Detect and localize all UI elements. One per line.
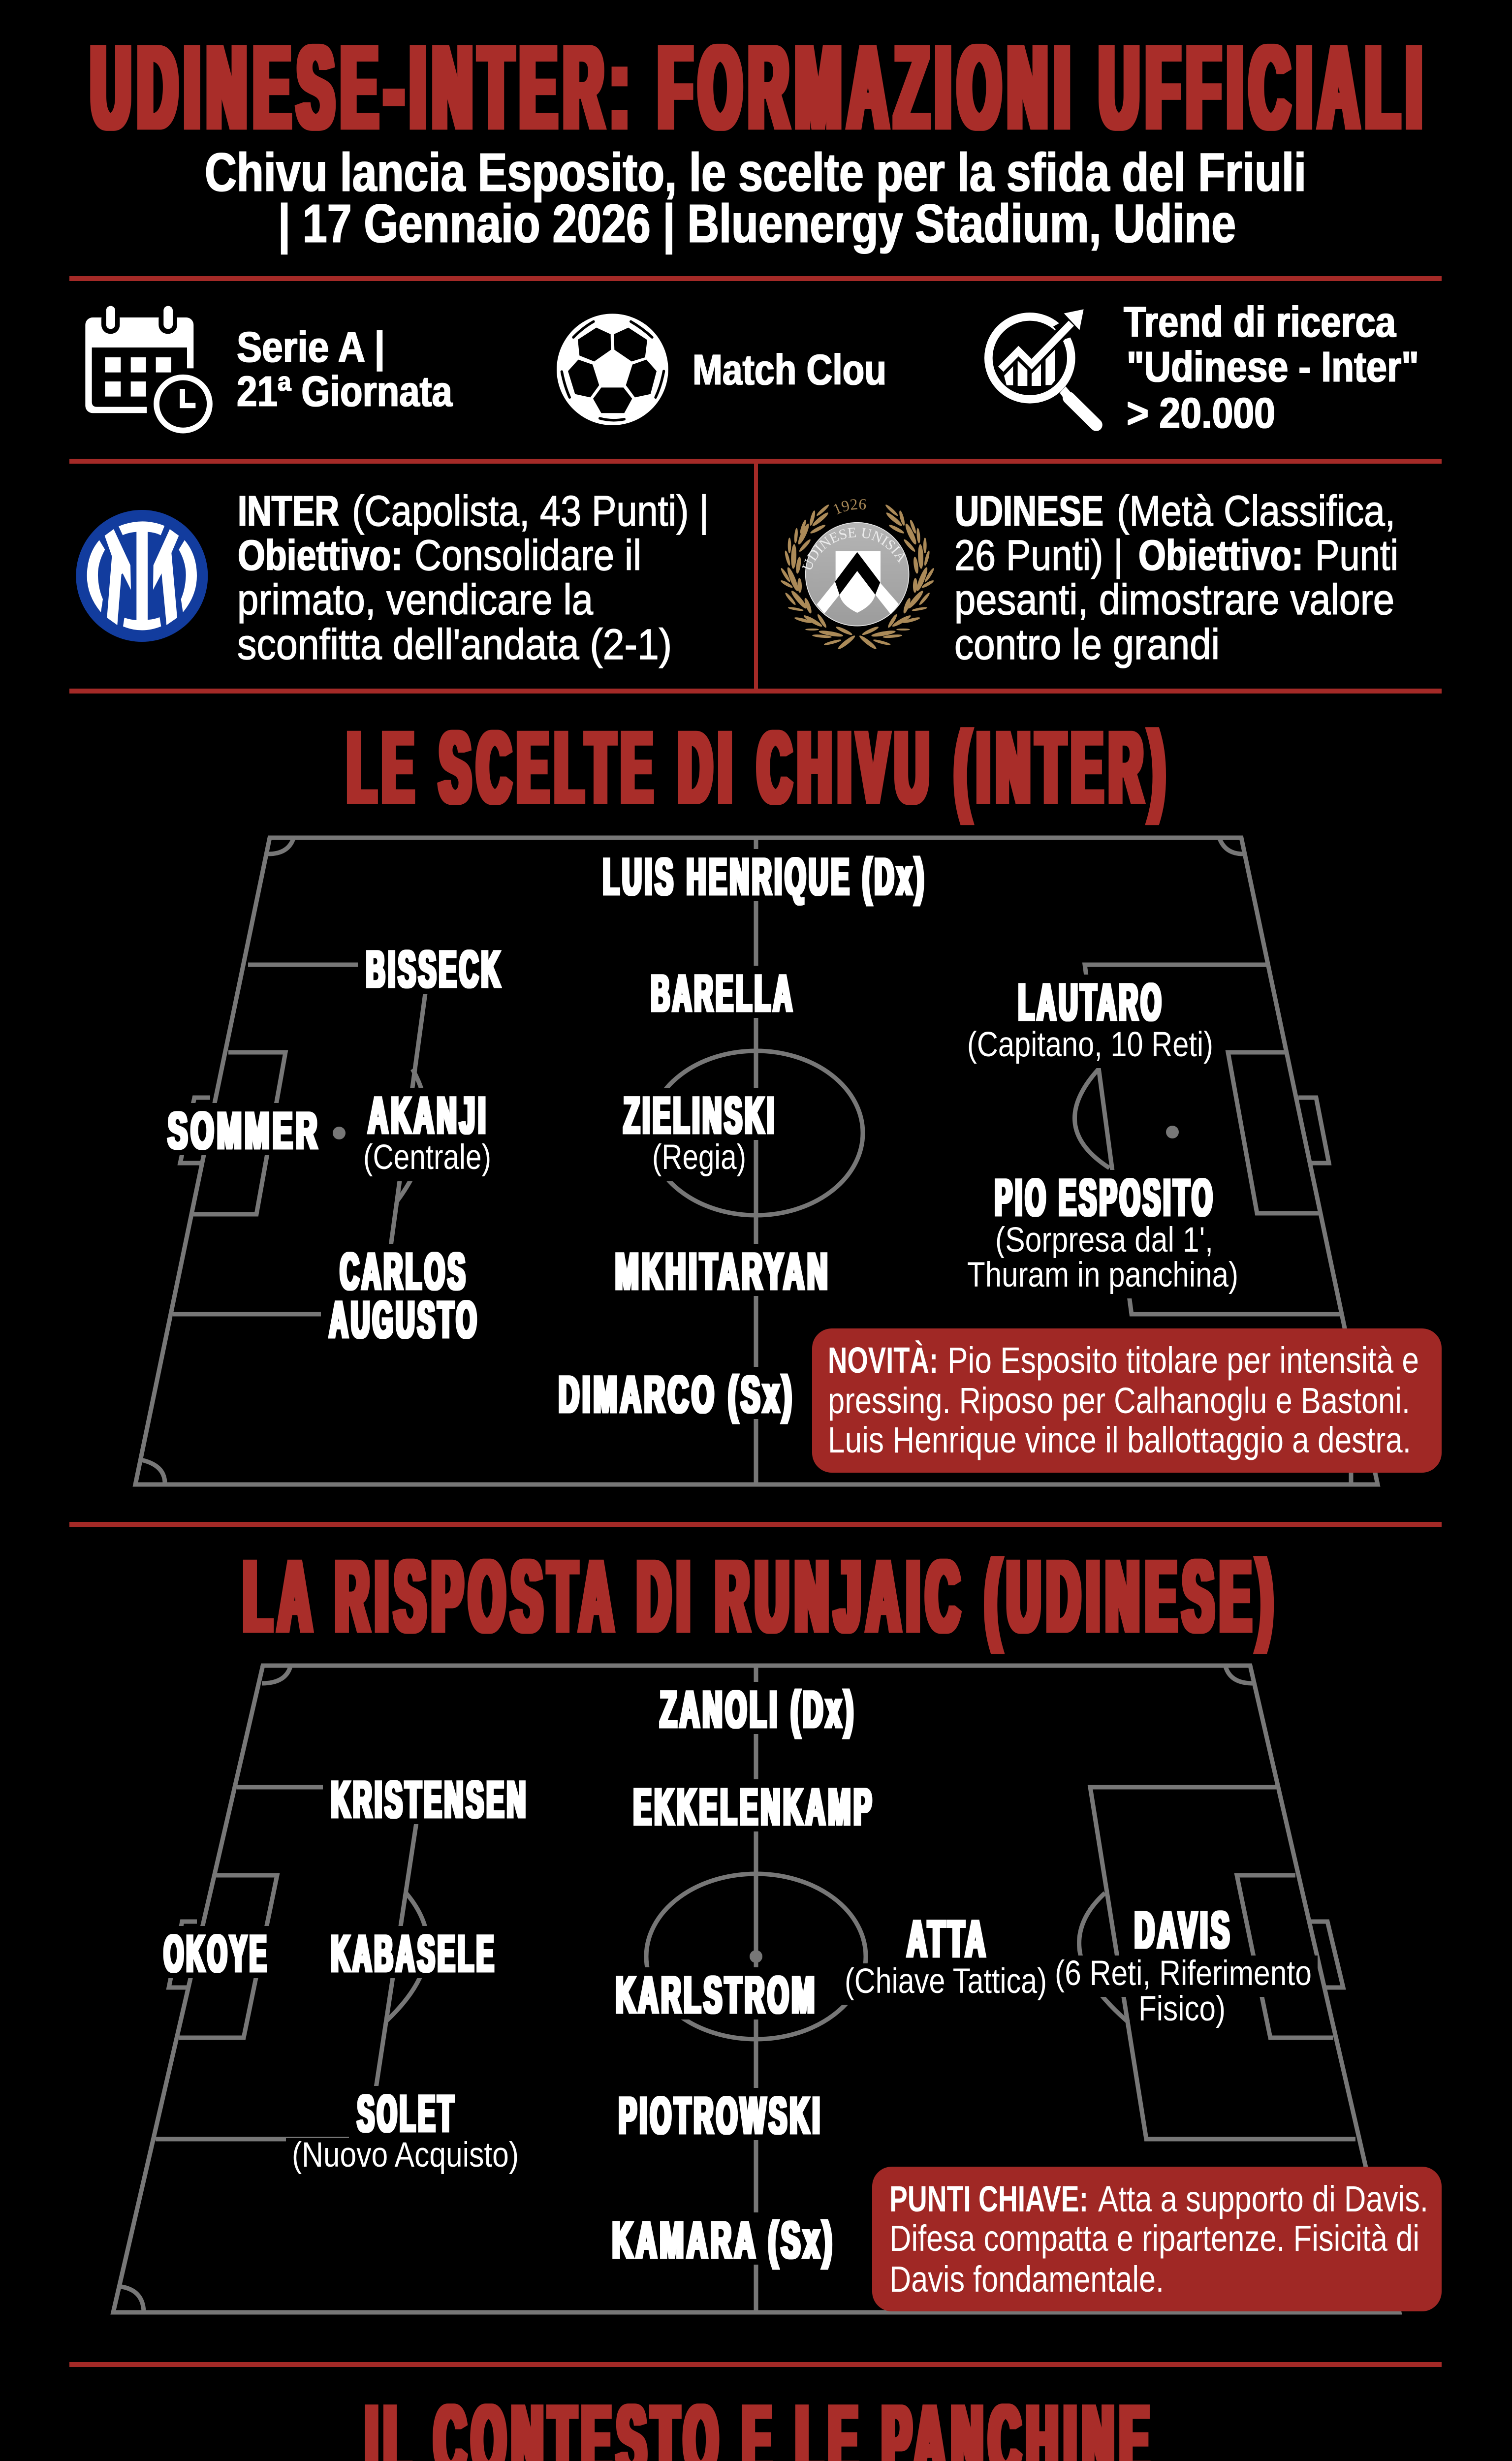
player: Karlstrom xyxy=(607,1966,822,2024)
logo: Udinese: UDINESE UNISIA xyxy=(802,528,905,569)
player: Davis xyxy=(1049,1901,1318,2032)
callout: punti chiave: PUNTI CHIAVE: xyxy=(889,2178,1088,2219)
text: Inter objective xyxy=(237,487,709,668)
player: Atta: (Chiave Tattica) xyxy=(845,1962,1047,2001)
text: search trend: > 20.000 xyxy=(1127,389,1275,437)
text: Udinese objective: pesanti, dimostrare valore xyxy=(954,576,1394,624)
callout: punti chiave: Atta a supporto di Davis. xyxy=(1098,2178,1428,2219)
player: Pio Esposito: (Sorpresa dal 1', xyxy=(995,1221,1213,1260)
player: Kamara: KAMARA (Sx) xyxy=(612,2211,835,2269)
player: Luis Henrique: LUIS HENRIQUE (Dx) xyxy=(603,848,927,906)
player: Piotrowski: PIOTROWSKI xyxy=(619,2087,823,2145)
logo: Inter xyxy=(76,510,208,642)
text: Inter objective: INTER xyxy=(238,487,339,535)
player: Mkhitaryan: MKHITARYAN xyxy=(615,1243,831,1300)
player: Atta xyxy=(839,1910,1053,2005)
player: Solet: SOLET xyxy=(357,2085,456,2143)
player: Karlstrom: KARLSTROM xyxy=(616,1966,818,2024)
player: Pio Esposito: Thuram in panchina) xyxy=(967,1256,1238,1294)
callout: novità: Pio Esposito titolare per intensità e xyxy=(947,1340,1419,1381)
subtitle xyxy=(205,142,1306,254)
player: Davis: Fisico) xyxy=(1138,1989,1226,2028)
text: competition: 21ª Giornata xyxy=(237,368,453,415)
player: Dimarco xyxy=(550,1366,800,1423)
player: Lautaro xyxy=(961,974,1219,1068)
player: Sommer xyxy=(159,1102,325,1160)
player: Akanji xyxy=(357,1087,497,1181)
pitch lines: Inter xyxy=(135,838,1378,1484)
player: Kristensen: KRISTENSEN xyxy=(331,1771,529,1829)
text: search trend: Trend di ricerca xyxy=(1124,298,1396,346)
text: Inter objective: (Capolista, 43 Punti) | xyxy=(352,487,709,535)
text: Udinese objective: UDINESE xyxy=(955,487,1103,535)
player: Carlos Augusto: AUGUSTO xyxy=(329,1291,479,1349)
text: Udinese objective xyxy=(954,487,1398,668)
player: Kristensen xyxy=(323,1771,534,1829)
pitch lines: Udinese xyxy=(113,1666,1399,2312)
player: Zanoli xyxy=(652,1681,861,1738)
callout: punti chiave: Davis fondamentale. xyxy=(889,2259,1164,2300)
player: Davis: DAVIS xyxy=(1134,1901,1232,1959)
player: Solet xyxy=(286,2085,525,2179)
player: Atta: ATTA xyxy=(907,1910,988,1968)
player: Okoye xyxy=(156,1925,274,1983)
player: Luis Henrique xyxy=(595,848,932,906)
player: Barella: BARELLA xyxy=(651,965,795,1022)
player: Kamara xyxy=(604,2211,840,2269)
player: Akanji: (Centrale) xyxy=(363,1138,491,1177)
text: search trend xyxy=(1124,298,1419,437)
player: Kabasele xyxy=(323,1925,502,1983)
text: Inter objective: Consolidare il xyxy=(414,532,641,579)
text: match clou: Match Clou xyxy=(693,346,886,394)
player: Lautaro: (Capitano, 10 Reti) xyxy=(967,1025,1213,1064)
text: Udinese objective: (Metà Classifica, xyxy=(1117,487,1395,535)
player: Pio Esposito xyxy=(961,1169,1244,1298)
text: Udinese objective: contro le grandi xyxy=(954,621,1220,668)
player: Zanoli: ZANOLI (Dx) xyxy=(660,1681,856,1738)
text: Inter objective: sconfitta dell'andata (2-1) xyxy=(237,621,672,668)
player: Carlos Augusto: CARLOS xyxy=(340,1243,468,1300)
player: Zielinski: ZIELINSKI xyxy=(624,1087,777,1144)
player: Zielinski xyxy=(615,1087,782,1181)
player: Lautaro: LAUTARO xyxy=(1018,974,1164,1031)
player: Mkhitaryan xyxy=(607,1243,836,1300)
callout: novità: pressing. Riposo per Calhanoglu e Bastoni. xyxy=(828,1380,1410,1421)
player: Piotrowski xyxy=(610,2087,828,2145)
text: Inter objective: primato, vendicare la xyxy=(237,576,594,624)
player: Bisseck: BISSECK xyxy=(366,941,503,998)
player: Akanji: AKANJI xyxy=(368,1087,489,1144)
text: Udinese objective: 26 Punti) | xyxy=(954,532,1123,579)
player: Carlos Augusto xyxy=(321,1243,484,1349)
text: Udinese objective: Obiettivo: xyxy=(1138,532,1303,579)
player: Barella xyxy=(643,965,800,1022)
player: Solet: (Nuovo Acquisto) xyxy=(292,2136,519,2175)
text: Inter objective: Obiettivo: xyxy=(238,532,403,579)
logo: Udinese: 1926 xyxy=(834,499,866,515)
player: Okoye: OKOYE xyxy=(164,1925,269,1983)
panel: Inter pitch xyxy=(135,838,1442,1484)
player: Ekkelenkamp: EKKELENKAMP xyxy=(633,1778,875,1836)
player: Dimarco: DIMARCO (Sx) xyxy=(559,1366,795,1423)
player: Ekkelenkamp xyxy=(625,1778,880,1836)
player: Pio Esposito: PIO ESPOSITO xyxy=(995,1169,1215,1227)
player: Sommer: SOMMER xyxy=(168,1102,320,1160)
icon: football xyxy=(557,314,668,425)
text: competition xyxy=(237,323,453,415)
text: competition: Serie A | xyxy=(237,323,385,372)
player: Kabasele: KABASELE xyxy=(331,1925,497,1983)
player: Zielinski: (Regia) xyxy=(652,1138,746,1177)
player: Bisseck xyxy=(358,941,508,998)
callout: novità: NOVITÀ: xyxy=(828,1340,938,1381)
callout: novità xyxy=(812,1328,1442,1473)
subtitle: | 17 Gennaio 2026 | Bluenergy Stadium, Udine xyxy=(278,193,1236,254)
icon: calendar xyxy=(85,306,215,436)
player: Davis: (6 Reti, Riferimento xyxy=(1055,1954,1312,1993)
callout: punti chiave xyxy=(872,2167,1442,2311)
logo: Udinese xyxy=(781,499,934,649)
callout: punti chiave: Difesa compatta e ripartenze. Fisicità di xyxy=(889,2218,1419,2259)
panel: Udinese pitch xyxy=(113,1666,1442,2312)
text: search trend: "Udinese - Inter" xyxy=(1127,343,1419,391)
icon: search trend xyxy=(988,309,1096,425)
callout: novità: Luis Henrique vince il ballottaggio a destra. xyxy=(828,1420,1411,1460)
text: Udinese objective: Punti xyxy=(1315,532,1398,579)
